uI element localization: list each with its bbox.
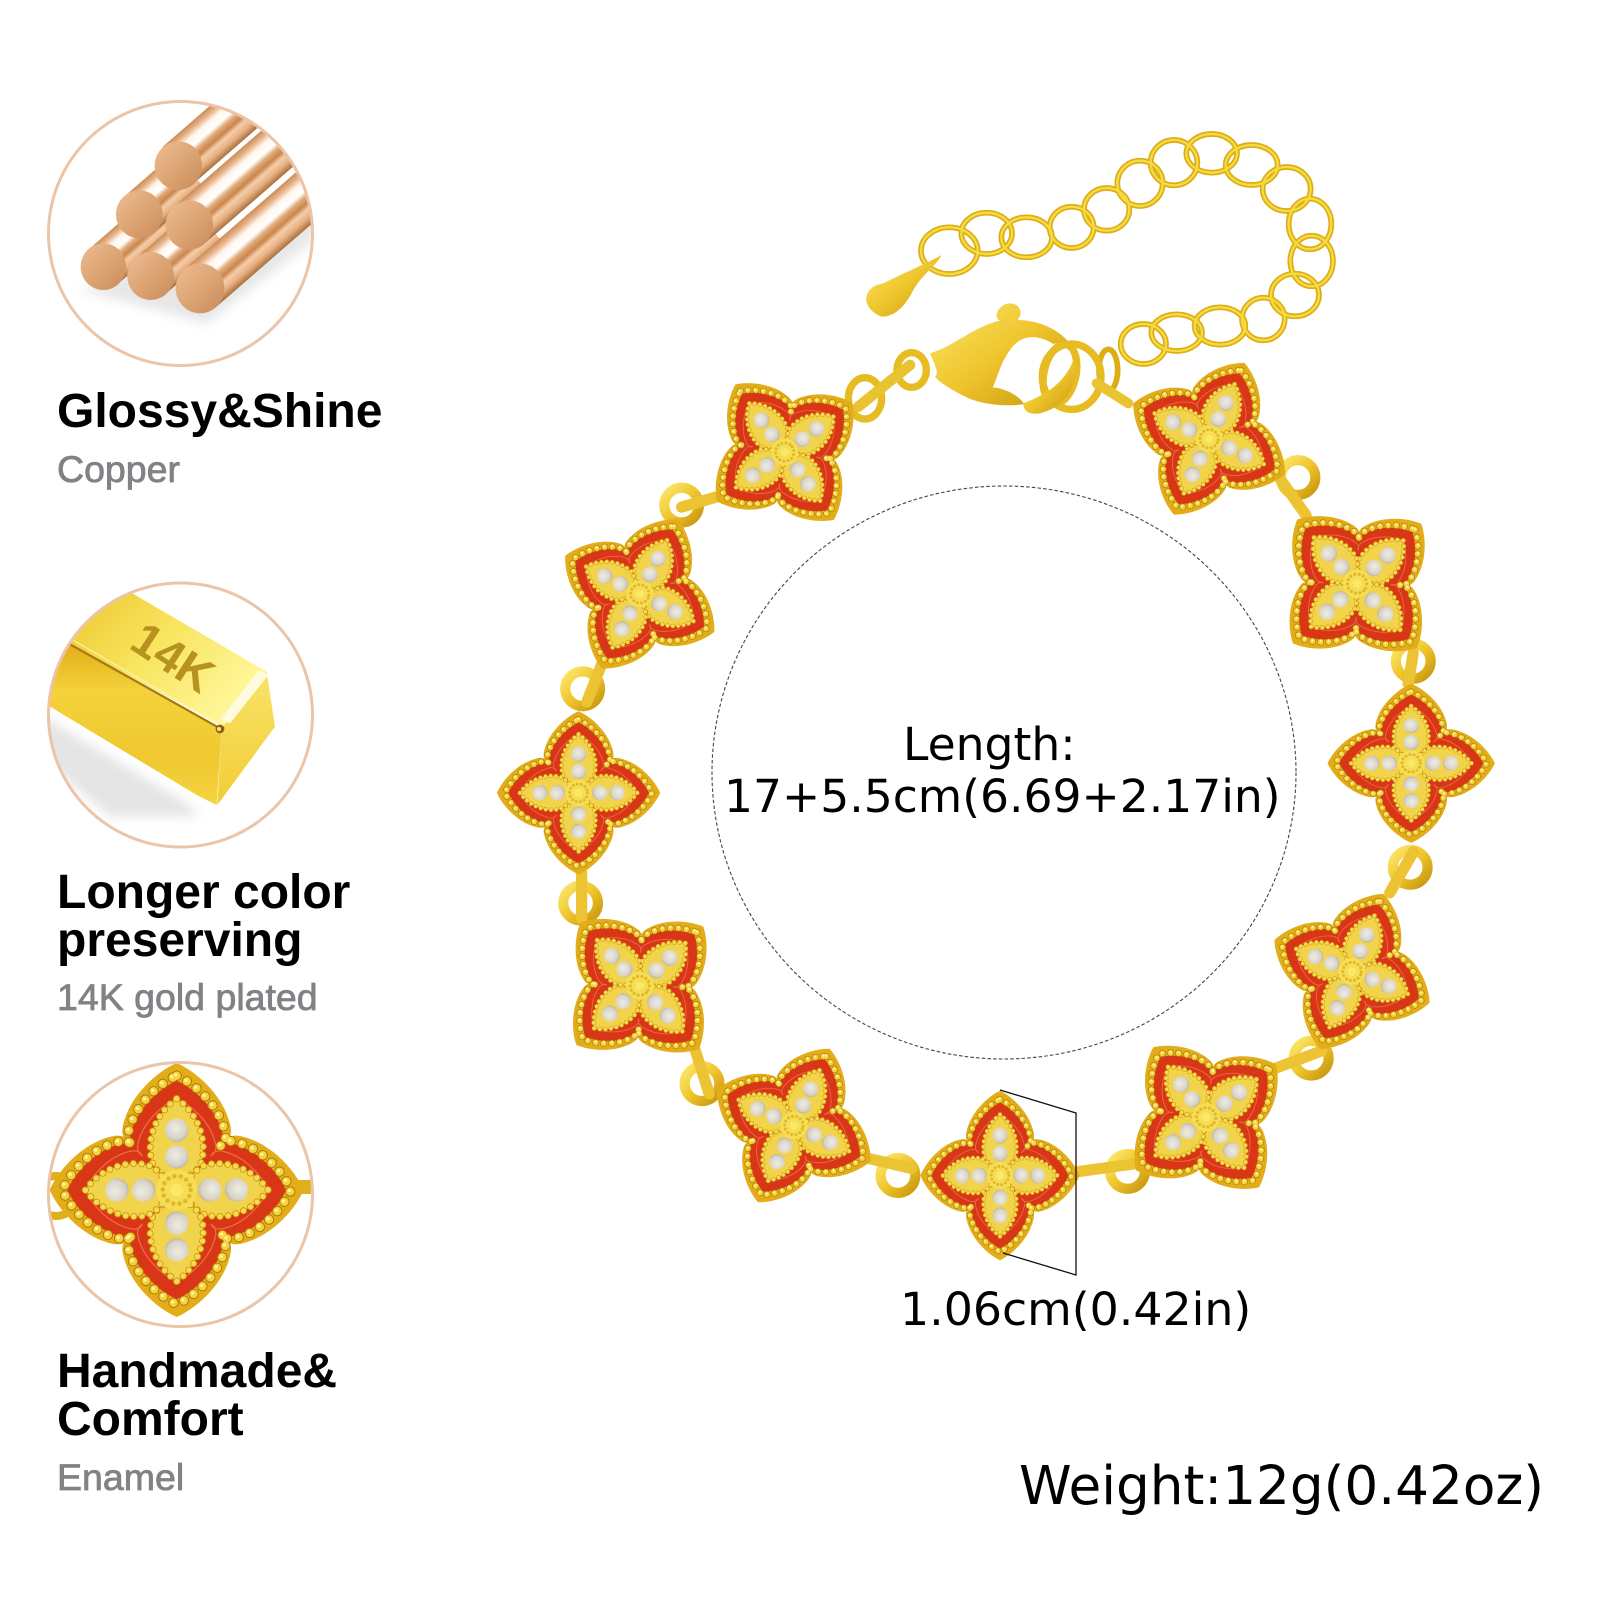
clasp jump rings [848,341,1101,419]
extender chain and clasp [848,134,1333,419]
text: Copper: Copper [57,448,180,490]
charm size label: 1.06cm(0.42in) [900,1282,1251,1336]
panel: copper feature [48,90,382,438]
flower charm 8 [1243,862,1461,1080]
lobster clasp [930,303,1067,405]
charm width bracket [1000,1090,1076,1275]
dotted inner diameter circle [712,486,1296,1059]
chain end drop [866,255,942,317]
panel: enamel feature [36,1062,337,1446]
chain highlights [921,134,1333,364]
heading: Longer color preserving: preserving [57,914,302,967]
panel: gold plating feature [40,583,350,967]
flower charm 11 [1098,328,1320,550]
icon: enamel flower in circle [36,1062,318,1326]
flower charm 2 [527,481,752,706]
icon: copper rods in circle [47,100,314,367]
bracelet charms [497,328,1495,1260]
extender chain [921,134,1333,391]
text: 14K gold plated: 14K gold plated [57,976,318,1018]
clasp link bar [858,365,910,407]
flower charm 10 [1233,460,1481,708]
flower charm 9 [1328,684,1495,843]
heading: Longer color preserving: Longer color [57,866,350,919]
clasp hook [1023,360,1075,414]
flower charm 3 [497,711,660,874]
text: Enamel: Enamel [57,1456,184,1498]
length label: Length: [903,718,1076,771]
flower charm 7 [1083,994,1329,1240]
heading: Handmade& Comfort: Handmade& [57,1345,337,1398]
heading: Handmade& Comfort: Comfort [57,1393,244,1446]
icon: 14K gold bar in circle: 14K [122,612,223,704]
length label: 17+5.5cm(6.69+2.17in) [724,770,1281,823]
weight label: Weight:12g(0.42oz) [1019,1455,1544,1517]
heading: Glossy&Shine: Glossy&Shine [57,385,382,438]
flower charm 1 [668,335,902,569]
flower charm 5 [681,1013,906,1238]
flower charm 6 [920,1091,1080,1260]
flower charm 4 [517,863,762,1108]
icon: 14K gold bar in circle [40,583,312,847]
bracelet links [563,460,1431,1193]
